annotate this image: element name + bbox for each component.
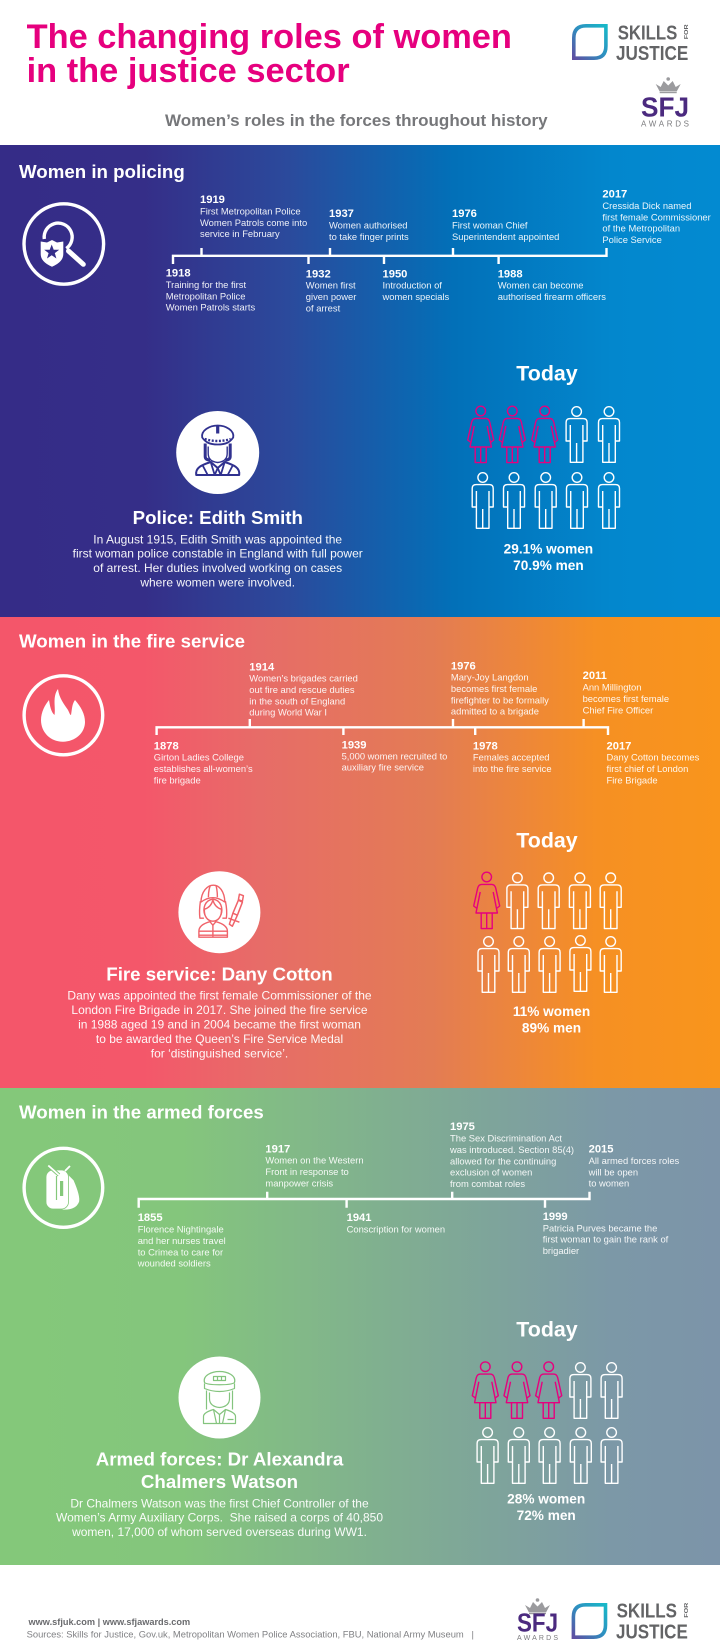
event 1975: from combat roles: [450, 1178, 525, 1189]
timeline: fire service: [157, 719, 608, 735]
heading: fire service: Women in the fire service: [19, 631, 245, 652]
bio: Dany Cotton: for ‘distinguished service’.: [151, 1046, 288, 1060]
event 1978: Females accepted: [473, 752, 550, 763]
logo: SFJ Awards (footer): AWARDS: [517, 1635, 558, 1642]
event 1976 fire: admitted to a brigade: [451, 706, 539, 717]
event 1976: Superintendent appointed: [452, 231, 559, 242]
logo: Skills for Justice (top): JUSTICE: [616, 43, 688, 65]
event 1919: 1919: [200, 194, 225, 206]
pictogram: 3 women, 7 men: [468, 406, 620, 528]
event 1918: Women Patrols starts: [166, 302, 255, 313]
icon: magnifier with shield: [24, 204, 104, 284]
heading: today (armed): Today: [516, 1318, 578, 1342]
event 2017 fire: Dany Cotton becomes: [606, 752, 700, 763]
event 1939: auxiliary fire service: [342, 762, 424, 773]
panel: women in the fire service: [0, 617, 720, 1088]
timeline: policing: [173, 248, 606, 264]
bio: Dany Cotton: to be awarded the Queen’s Fire Service Medal: [96, 1032, 343, 1046]
bio: Dany Cotton: Dany was appointed the first female Commissioner of the: [67, 988, 372, 1002]
bio: Edith Smith: of arrest. Her duties involved working on cases: [93, 561, 342, 575]
name: Dr Alexandra Chalmers Watson: Chalmers Watson: [141, 1471, 298, 1492]
heading: today (fire): Today: [516, 828, 578, 852]
event 1878: establishes all-women’s: [154, 763, 253, 774]
event 1918: 1918: [166, 268, 191, 280]
event 1917: Women on the Western: [265, 1155, 364, 1166]
event 2017 fire: Fire Brigade: [606, 774, 658, 785]
stats: armed: 72% men: [517, 1508, 576, 1523]
name: Edith Smith: Police: Edith Smith: [133, 507, 303, 528]
event 2011: 2011: [583, 670, 607, 682]
logo: Skills for Justice (footer): SKILLS: [617, 1601, 677, 1623]
icon: army officer portrait: [178, 1356, 260, 1438]
event 1939: 5,000 women recruited to: [342, 750, 447, 761]
subtitle: Women’s roles in the forces throughout history: [165, 111, 548, 130]
logo: SFJ Awards (top): SFJ: [641, 92, 689, 123]
event 1937: 1937: [329, 208, 354, 220]
event 1855: 1855: [138, 1212, 163, 1224]
bio: Edith Smith: In August 1915, Edith Smith was appointed the: [93, 532, 342, 546]
logo: Skills for Justice (top): SKILLS: [618, 22, 677, 44]
icon: police officer portrait: [176, 411, 259, 494]
event 2015: 2015: [589, 1144, 613, 1156]
event 1978: 1978: [473, 740, 498, 752]
bio: Dr Chalmers Watson: Women’s Army Auxiliary Corps. She raised a corps of 40,850: [56, 1511, 383, 1525]
event 1932: of arrest: [306, 302, 341, 313]
event 1976 fire: Mary-Joy Langdon: [451, 672, 529, 683]
bio: Edith Smith: where women were involved.: [139, 575, 295, 589]
heading: armed forces: Women in the armed forces: [19, 1101, 264, 1122]
event 1976 fire: firefighter to be formally: [451, 694, 549, 705]
timeline: armed forces: [139, 1192, 589, 1208]
event 1932: given power: [306, 291, 356, 302]
event 1878: fire brigade: [154, 774, 201, 785]
event 1918: Metropolitan Police: [166, 290, 245, 301]
bio: Dr Chalmers Watson: women, 17,000 of whom served overseas during WW1.: [71, 1525, 367, 1539]
event 1988: Women can become: [498, 280, 584, 291]
event 1914: 1914: [249, 662, 275, 674]
event 1919: First Metropolitan Police: [200, 206, 301, 216]
event 1855: and her nurses travel: [138, 1235, 226, 1246]
bio: Dany Cotton: London Fire Brigade in 2017. She joined the fire service: [71, 1003, 368, 1017]
stats: policing: 29.1% women: [504, 541, 593, 556]
icon: flame: [24, 676, 103, 755]
event 1975: allowed for the continuing: [450, 1155, 556, 1166]
event 1999: brigadier: [543, 1245, 579, 1256]
event 1878: Girton Ladies College: [154, 752, 244, 763]
event 1855: Florence Nightingale: [138, 1224, 224, 1235]
stats: fire: 89% men: [522, 1020, 581, 1035]
bio: Edith Smith: first woman police constable in England with full power: [73, 547, 363, 561]
event 1919: Women Patrols come into: [200, 217, 307, 228]
heading: today (policing): Today: [516, 362, 578, 386]
stats: fire: 11% women: [513, 1004, 590, 1019]
pictogram: 1 woman, 9 men: [474, 872, 621, 992]
event 1914: during World War I: [249, 707, 327, 718]
logo: SFJ Awards (top): [641, 77, 689, 129]
event 1855: wounded soldiers: [137, 1258, 211, 1269]
logo: SFJ Awards (footer): SFJ: [517, 1608, 558, 1638]
event 1914: Women’s brigades carried: [249, 673, 358, 684]
pictogram: 3 women, 7 men (armed): [472, 1362, 622, 1483]
event 1932: 1932: [306, 268, 331, 280]
logo: SFJ Awards (footer): [517, 1598, 558, 1642]
bio: Dany Cotton: in 1988 aged 19 and in 2004 became the first woman: [78, 1017, 361, 1031]
event 1975: was introduced. Section 85(4): [449, 1144, 574, 1155]
panel: women in the armed forces: [0, 1088, 720, 1565]
logo: SFJ Awards (top): AWARDS: [641, 120, 689, 129]
name: Dany Cotton: Fire service: Dany Cotton: [106, 964, 333, 985]
event 2011: Ann Millington: [583, 682, 641, 693]
event 2017 fire: 2017: [606, 740, 631, 752]
event 1917: 1917: [265, 1143, 290, 1155]
footer links: www.sfjuk.com | www.sfjawards.com: [28, 1617, 190, 1627]
event 1917: manpower crisis: [265, 1177, 333, 1188]
title: in the justice sector: [27, 52, 350, 90]
event 1937: Women authorised: [329, 220, 408, 230]
event 2017: Police Service: [602, 234, 662, 245]
stats: policing: 70.9% men: [513, 558, 584, 573]
event 2011: becomes first female: [583, 693, 669, 704]
event 1914: in the south of England: [249, 695, 345, 706]
event 1918: Training for the first: [166, 279, 247, 290]
event 1878: 1878: [154, 740, 179, 752]
event 1975: The Sex Discrimination Act: [450, 1133, 562, 1144]
event 2015: to women: [589, 1178, 629, 1189]
event 1914: out fire and rescue duties: [249, 684, 355, 695]
event 1999: first woman to gain the rank of: [543, 1234, 669, 1245]
panel: women in policing: [0, 145, 720, 617]
icon: firefighter portrait: [178, 871, 260, 953]
event 1976: 1976: [452, 208, 477, 220]
footer sources: Sources: Skills for Justice, Gov.uk, Metropolitan Women Police Association, FBU, National Army Museum |: [27, 1628, 474, 1639]
event 1919: service in February: [200, 228, 280, 239]
event 1975: exclusion of women: [450, 1167, 532, 1178]
event 1855: to Crimea to care for: [138, 1246, 223, 1257]
event 1999: Patricia Purves became the: [543, 1222, 657, 1233]
logo: Skills for Justice (footer): JUSTICE: [616, 1621, 688, 1643]
event 2015: will be open: [588, 1166, 638, 1177]
event 1937: to take finger prints: [329, 231, 409, 242]
event 2017: first female Commissioner: [602, 211, 711, 222]
event 2017 fire: first chief of London: [606, 763, 688, 774]
event 2011: Chief Fire Officer: [583, 704, 653, 715]
icon: dog tags: [24, 1148, 103, 1227]
logo: Skills for Justice (top): FOR: [684, 24, 690, 39]
logo: Skills for Justice (footer): [573, 1601, 690, 1643]
logo: Skills for Justice (footer): FOR: [684, 1603, 690, 1618]
event 1976 fire: becomes first female: [451, 683, 537, 694]
event 2017: 2017: [602, 188, 627, 200]
event 1941: Conscription for women: [347, 1224, 445, 1235]
title: The changing roles of women: [27, 18, 512, 56]
event 1976 fire: 1976: [451, 660, 476, 672]
event 1917: Front in response to: [265, 1166, 349, 1177]
event 1950: 1950: [382, 268, 407, 280]
event 1988: authorised firearm officers: [498, 291, 606, 302]
event 1999: 1999: [543, 1211, 568, 1223]
event 1978: into the fire service: [473, 763, 552, 774]
event 2017: Cressida Dick named: [602, 200, 692, 211]
event 1950: Introduction of: [382, 280, 442, 291]
stats: armed: 28% women: [507, 1491, 585, 1506]
event 2015: All armed forces roles: [589, 1155, 680, 1166]
event 1932: Women first: [306, 280, 356, 291]
name: Dr Alexandra Chalmers Watson: Armed forces: Dr Alexandra: [96, 1448, 344, 1469]
event 1941: 1941: [347, 1212, 371, 1224]
event 1939: 1939: [342, 739, 366, 751]
logo: Skills for Justice (top): [574, 22, 690, 65]
heading: policing: Women in policing: [19, 161, 185, 182]
bio: Dr Chalmers Watson: Dr Chalmers Watson was the first Chief Controller of the: [70, 1496, 369, 1510]
event 2017: of the Metropolitan: [602, 223, 680, 234]
event 1975: 1975: [450, 1121, 475, 1133]
event 1988: 1988: [498, 268, 523, 280]
event 1976: First woman Chief: [452, 220, 528, 230]
event 1950: women specials: [382, 291, 450, 302]
